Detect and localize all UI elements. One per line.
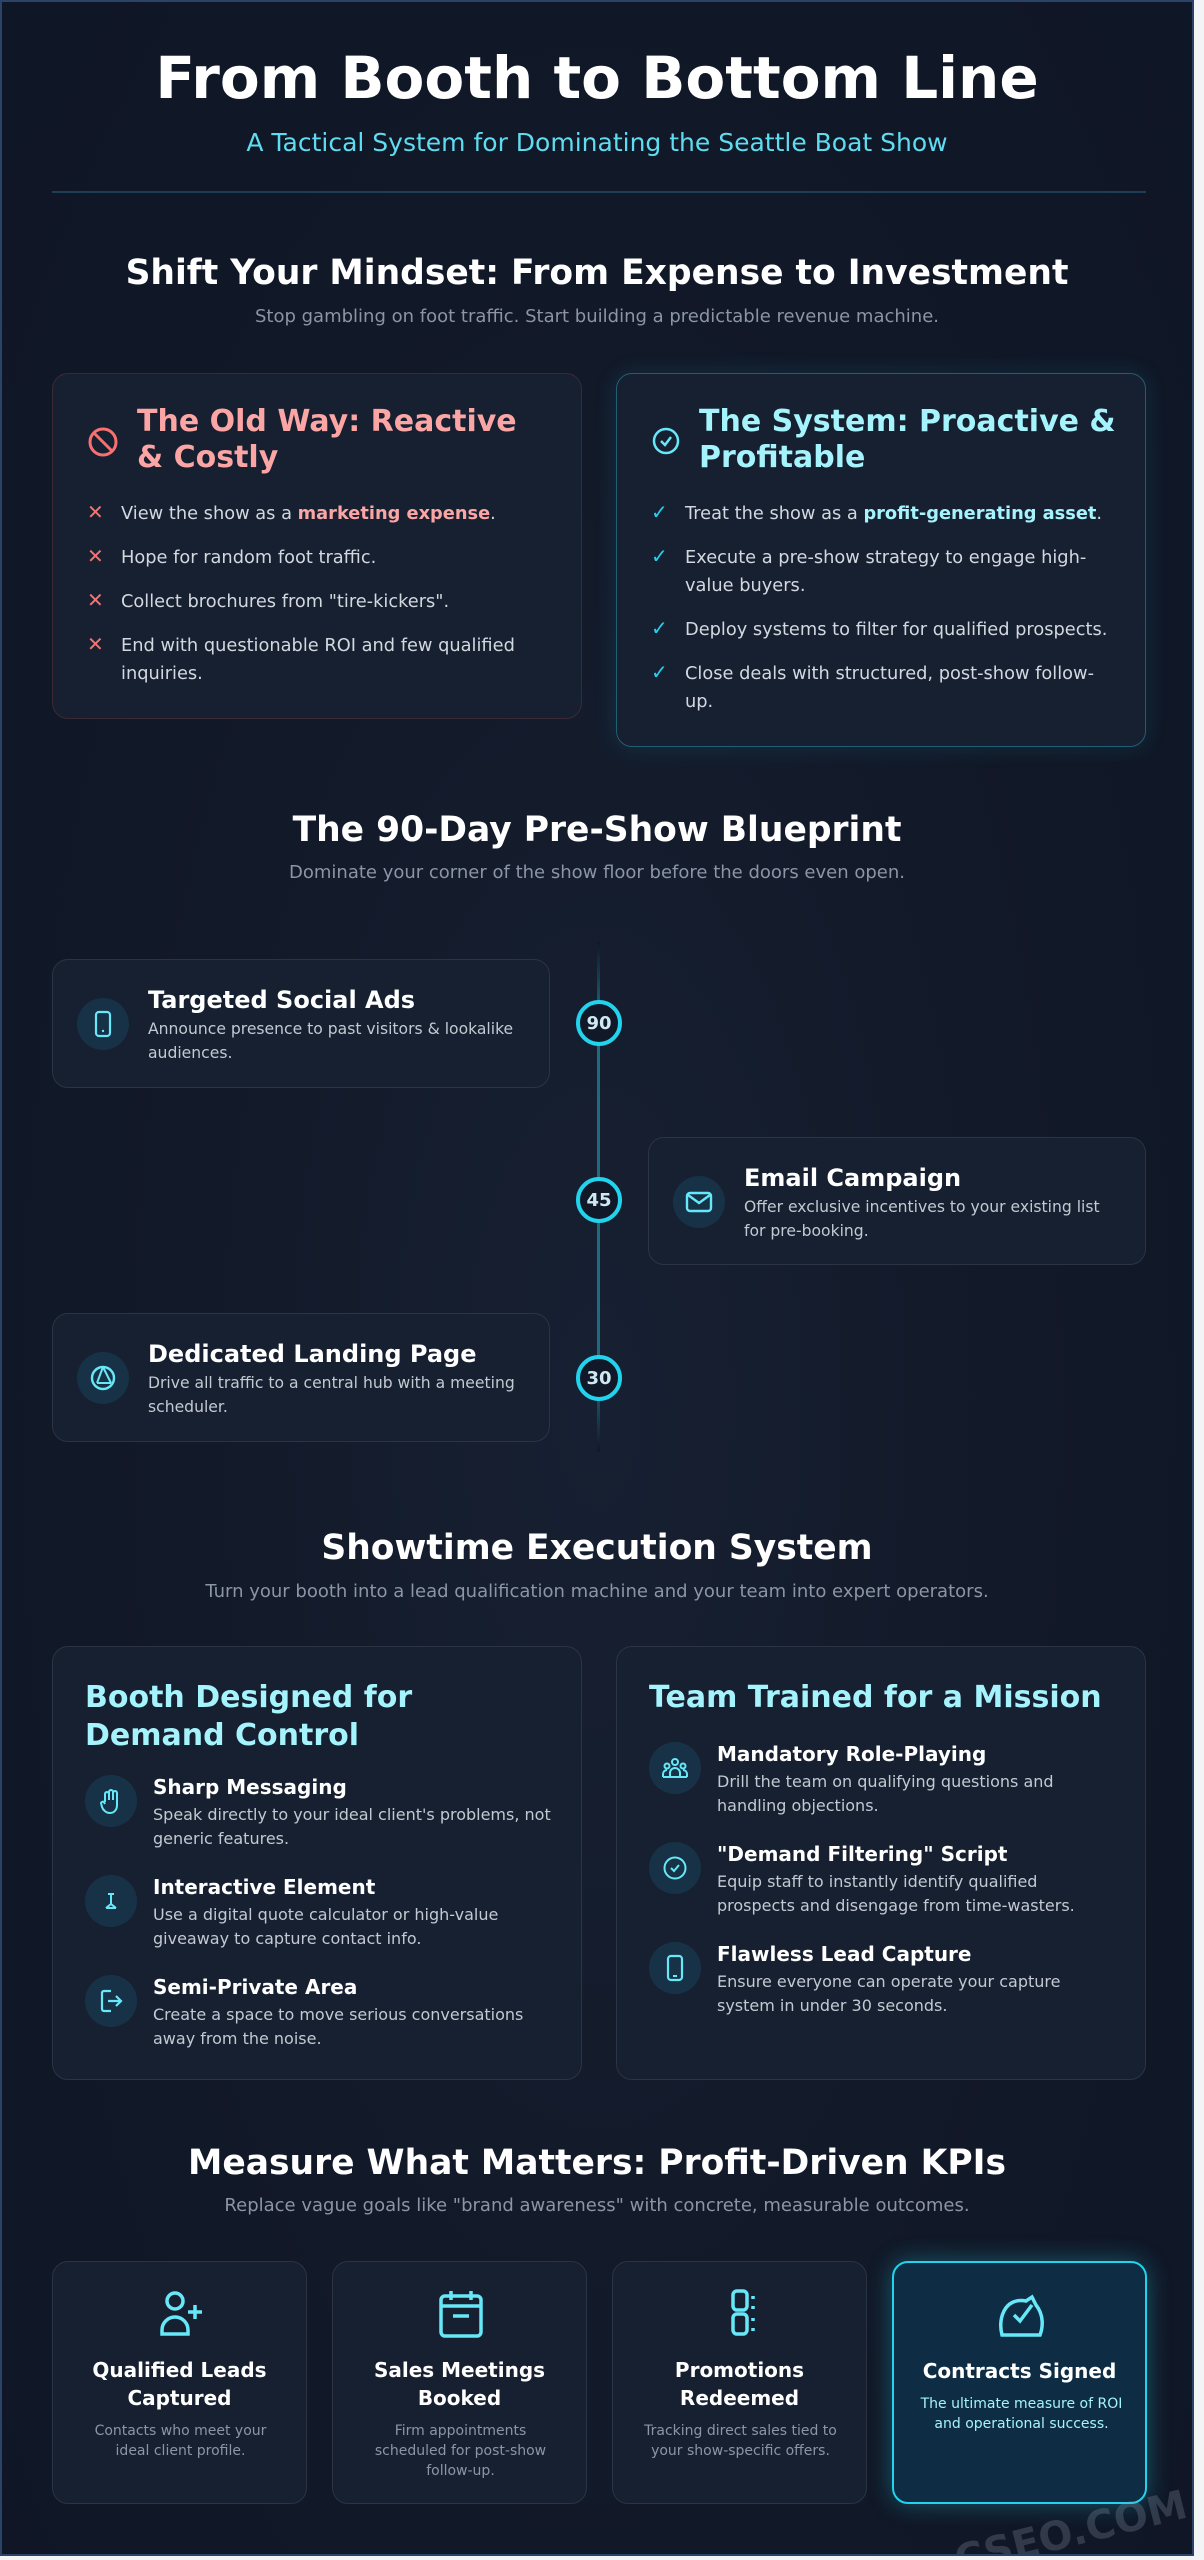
team heading: Team Trained for a Mission — [649, 1680, 1102, 1715]
icon: phone — [77, 998, 129, 1050]
system list: Deploy systems to filter for qualified prospects. — [685, 619, 1107, 640]
item: role-playing — [649, 1742, 1054, 1815]
kpi: promotions: Tracking direct sales tied to your show-specific offers. — [644, 2423, 837, 2459]
item: demand filtering: "Demand Filtering" Script — [717, 1842, 1007, 1866]
old way list: Hope for random foot traffic. — [121, 547, 376, 568]
panel: system — [616, 373, 1146, 747]
subheading: blueprint: Dominate your corner of the show floor before the doors even open. — [289, 862, 905, 883]
old way list: End with questionable ROI and few qualified inquiries. — [121, 635, 515, 684]
system list — [651, 500, 1107, 712]
marker 30 — [576, 1355, 622, 1401]
heading: mindset: Shift Your Mindset: From Expense to Investment — [126, 253, 1068, 293]
kpi: qualified leads — [52, 2261, 307, 2504]
item: lead capture: Flawless Lead Capture — [717, 1942, 971, 1966]
icon: check circle — [652, 428, 680, 454]
old way list: ✕ — [87, 588, 104, 612]
kpi: contracts (highlight): Contracts Signed — [923, 2359, 1116, 2383]
timeline card: landing page: Drive all traffic to a central hub with a meeting scheduler. — [148, 1374, 515, 1416]
item: lead capture — [649, 1942, 1060, 2015]
kpi: meetings: Booked — [418, 2386, 501, 2410]
timeline card: social ads: Targeted Social Ads — [148, 986, 415, 1014]
timeline card: email — [648, 1137, 1146, 1265]
old way list: ✕ — [87, 544, 104, 568]
item: interactive — [85, 1875, 498, 1948]
heading: blueprint: The 90-Day Pre-Show Blueprint — [293, 810, 901, 850]
system list: ✓ — [651, 660, 668, 684]
subheading: KPIs: Replace vague goals like "brand awareness" with concrete, measurable outcomes. — [224, 2195, 970, 2216]
kpi: promotions: Redeemed — [680, 2386, 799, 2410]
kpi: promotions — [612, 2261, 867, 2504]
booth heading: Booth Designed for Demand Control — [85, 1680, 412, 1753]
old way list: ✕ — [87, 500, 104, 524]
system list: Close deals with structured, post-show follow-up. — [685, 663, 1094, 712]
panel: team — [616, 1646, 1146, 2080]
item: semi-private — [85, 1975, 523, 2048]
old way list: Collect brochures from "tire-kickers". — [121, 591, 449, 612]
system list: ✓ — [651, 544, 668, 568]
icon: user plus — [160, 2291, 202, 2336]
system list: Execute a pre-show strategy to engage high-value buyers. — [685, 547, 1086, 596]
timeline card: social ads — [52, 959, 550, 1088]
panel: booth — [52, 1646, 582, 2080]
marker 90 — [576, 1000, 622, 1046]
marker 45: 45 — [586, 1190, 612, 1210]
subheading: mindset: Stop gambling on foot traffic. Start building a predictable revenue machine. — [255, 306, 939, 327]
kpi: qualified leads: Qualified Leads — [92, 2358, 267, 2382]
old way list: ✕ — [87, 632, 104, 656]
timeline card: social ads: Announce presence to past visitors & lookalike audiences. — [148, 1020, 513, 1062]
system list: ✓ — [651, 616, 668, 640]
marker 30: 30 — [586, 1368, 612, 1388]
item: semi-private: Create a space to move serious conversations away from the noise. — [153, 2005, 523, 2048]
item: lead capture: Ensure everyone can operate your capture system in under 30 seconds. — [717, 1972, 1060, 2015]
subheading: showtime: Turn your booth into a lead qualification machine and your team into expert operators. — [205, 1581, 989, 1602]
system list: Treat the show as a profit-generating asset. — [685, 503, 1102, 524]
icon: gauge check — [999, 2294, 1044, 2337]
timeline card: landing page: Dedicated Landing Page — [148, 1340, 477, 1368]
icon: calendar — [439, 2291, 483, 2338]
item: demand filtering: Equip staff to instantly identify qualified prospects and disengage from time-wasters. — [717, 1872, 1075, 1915]
marker 45 — [576, 1177, 622, 1223]
title: From Booth to Bottom Line — [155, 44, 1039, 112]
panel: old way — [52, 373, 582, 719]
system list: ✓ — [651, 500, 668, 524]
kpi: meetings: Firm appointments scheduled for post-show follow-up. — [375, 2423, 546, 2479]
item: interactive: Use a digital quote calculator or high-value giveaway to capture contact info. — [153, 1905, 498, 1948]
timeline card: landing page — [52, 1313, 550, 1442]
kpi: meetings: Sales Meetings — [374, 2358, 545, 2382]
item: sharp messaging: Speak directly to your ideal client's problems, not generic features. — [153, 1805, 551, 1848]
kpi: promotions: Promotions — [675, 2358, 804, 2382]
system heading: The System: Proactive & Profitable — [699, 404, 1116, 475]
item: sharp messaging — [85, 1775, 551, 1848]
heading: KPIs: Measure What Matters: Profit-Driven KPIs — [188, 2143, 1006, 2183]
old way heading: The Old Way: Reactive & Costly — [137, 404, 517, 475]
item: semi-private: Semi-Private Area — [153, 1975, 357, 1999]
kpi: contracts (highlight) — [892, 2261, 1147, 2504]
icon: prohibited — [88, 428, 118, 456]
kpi: qualified leads: Captured — [127, 2386, 232, 2410]
subtitle: A Tactical System for Dominating the Seattle Boat Show — [246, 128, 948, 157]
item: sharp messaging: Sharp Messaging — [153, 1775, 347, 1799]
kpi: qualified leads: Contacts who meet your ideal client profile. — [95, 2423, 266, 2459]
icon: mail — [673, 1176, 725, 1228]
icon: tags — [731, 2289, 755, 2336]
old way list — [87, 500, 515, 684]
item: role-playing: Mandatory Role-Playing — [717, 1742, 986, 1766]
timeline card: email: Email Campaign — [744, 1164, 961, 1192]
heading: showtime: Showtime Execution System — [321, 1528, 873, 1568]
icon: aperture — [77, 1352, 129, 1404]
old way list: View the show as a marketing expense. — [121, 503, 496, 524]
item: demand filtering — [649, 1842, 1075, 1915]
item: role-playing: Drill the team on qualifying questions and handling objections. — [717, 1772, 1054, 1815]
item: interactive: Interactive Element — [153, 1875, 375, 1899]
timeline card: email: Offer exclusive incentives to your existing list for pre-booking. — [744, 1198, 1100, 1240]
kpi: contracts (highlight): The ultimate measure of ROI and operational success. — [921, 2396, 1122, 2432]
kpi: meetings — [332, 2261, 587, 2504]
marker 90: 90 — [586, 1012, 612, 1034]
